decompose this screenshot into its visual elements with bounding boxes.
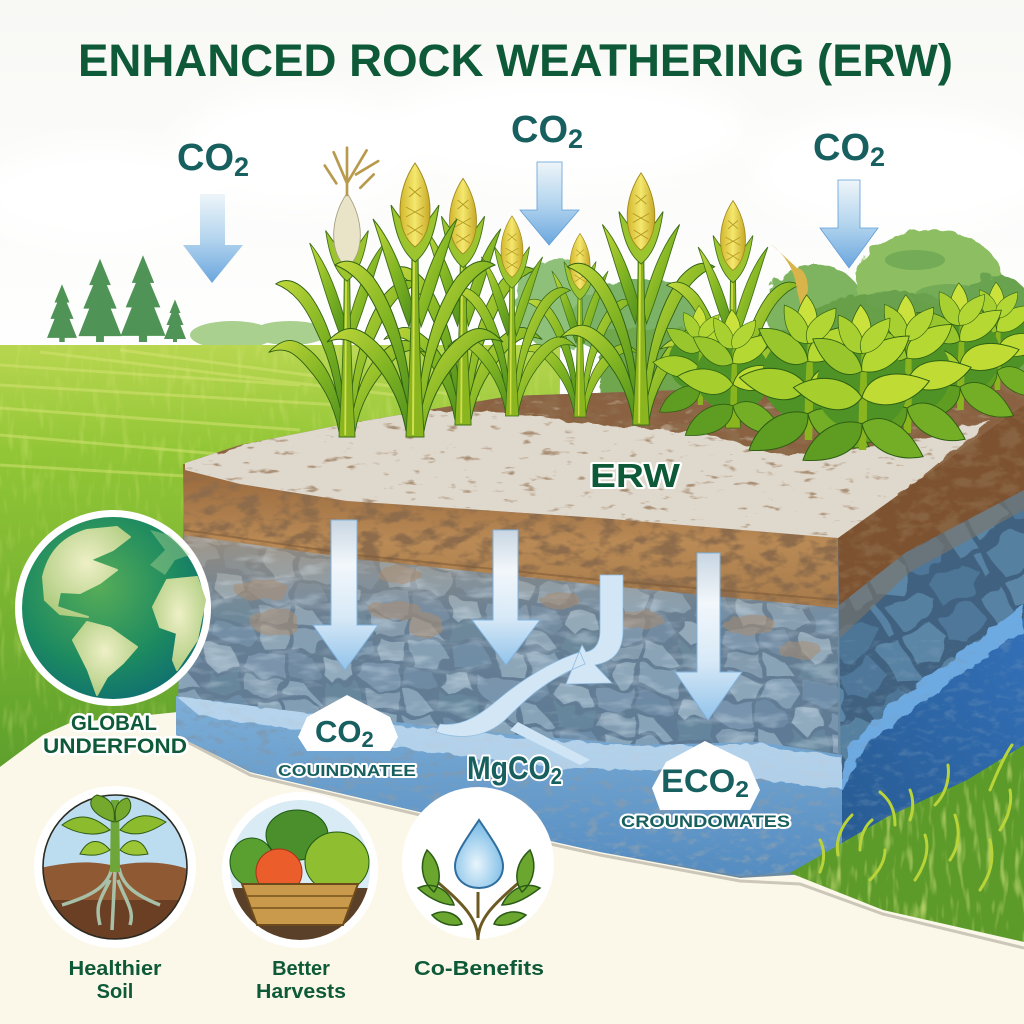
- background trees at right: [515, 229, 1024, 400]
- CO2 label left: 2: [234, 152, 249, 182]
- label: healthier soil: Healthier: [68, 958, 162, 980]
- corn and crop plants: [269, 148, 1024, 473]
- clouds: [0, 75, 1024, 245]
- CO2 callout left: [298, 695, 398, 752]
- ECO2 callout right: [652, 741, 760, 810]
- right face: [838, 405, 1024, 843]
- green field: [0, 345, 560, 775]
- CO2 label centre: 2: [568, 124, 583, 154]
- arrow: soil 2: [472, 530, 540, 665]
- distant bushes: [190, 321, 328, 349]
- plant: corn 1 with pale cob and tassel: [269, 148, 425, 437]
- streaks of flow in water: [510, 722, 590, 765]
- plant: corn 6: [560, 173, 722, 425]
- row of leafy crops: [651, 282, 1024, 473]
- cream mask under grass: [0, 712, 1024, 1024]
- shadow under block: [180, 738, 1024, 948]
- MgCO2 label: MgCO: [467, 750, 561, 786]
- plant: corn 7: [660, 201, 806, 428]
- sky background: [0, 0, 1024, 400]
- globe label: UNDERFOND: [43, 735, 187, 758]
- icon: co-benefits water drop and sprigs: [402, 787, 554, 940]
- globe icon: [15, 510, 211, 706]
- globe label: [43, 712, 187, 758]
- CO2 callout left: CO: [315, 714, 362, 749]
- icon: healthier soil: [34, 786, 196, 950]
- arrow: curved flow through rock: [436, 575, 623, 736]
- arrow: CO2 left: [183, 194, 243, 283]
- soil block: [165, 375, 1024, 890]
- bottom cream background: [0, 690, 1024, 1024]
- grass bottom right: [780, 740, 1024, 950]
- CO2 label left: CO: [177, 137, 234, 179]
- label: better harvests: Harvests: [256, 981, 346, 1003]
- thin tassel corn at back: [770, 243, 808, 312]
- icon: better harvests: [222, 792, 378, 948]
- globe label: GLOBAL: [71, 712, 157, 735]
- plant: corn 5: [521, 233, 639, 417]
- label: healthier soil: Soil: [97, 981, 133, 1003]
- label: better harvests: Better: [272, 958, 330, 980]
- label: healthier soil: [68, 958, 162, 1003]
- groundwater label right: CROUNDOMATES: [621, 812, 790, 831]
- CO2 label centre: CO: [511, 109, 568, 151]
- front stone layer: [178, 535, 838, 754]
- MgCO2 label: 2: [551, 763, 562, 789]
- underlay: [176, 378, 1024, 878]
- distant trees: [47, 255, 186, 342]
- tree leaf shading: [865, 250, 985, 309]
- CO2 label right: 2: [870, 142, 885, 172]
- arrow: soil 4: [675, 553, 742, 720]
- label: better harvests: [256, 958, 346, 1003]
- front water layer: [176, 696, 842, 876]
- plant: corn 4: [448, 216, 576, 416]
- arrow: soil 1: [313, 520, 378, 670]
- label: co-benefits: Co-Benefits: [414, 958, 544, 980]
- ECO2 callout right: ECO: [661, 763, 730, 799]
- warm-toned pebbles: [234, 567, 822, 659]
- brown soil layer: [180, 460, 845, 610]
- arrow: CO2 centre: [520, 162, 579, 245]
- top gravel surface: [180, 375, 1024, 545]
- plant: corn 3: [384, 178, 542, 425]
- arrow: CO2 right: [820, 180, 878, 268]
- CO2 callout left: 2: [362, 727, 374, 752]
- title: ENHANCED ROCK WEATHERING (ERW): [78, 35, 953, 86]
- garbled groundwater label: COUINDNATEE: [278, 763, 416, 780]
- CO2 label right: CO: [813, 127, 870, 169]
- plant: corn 2: [327, 163, 503, 437]
- ERW label: ERW: [590, 457, 681, 494]
- ECO2 callout right: 2: [735, 776, 749, 802]
